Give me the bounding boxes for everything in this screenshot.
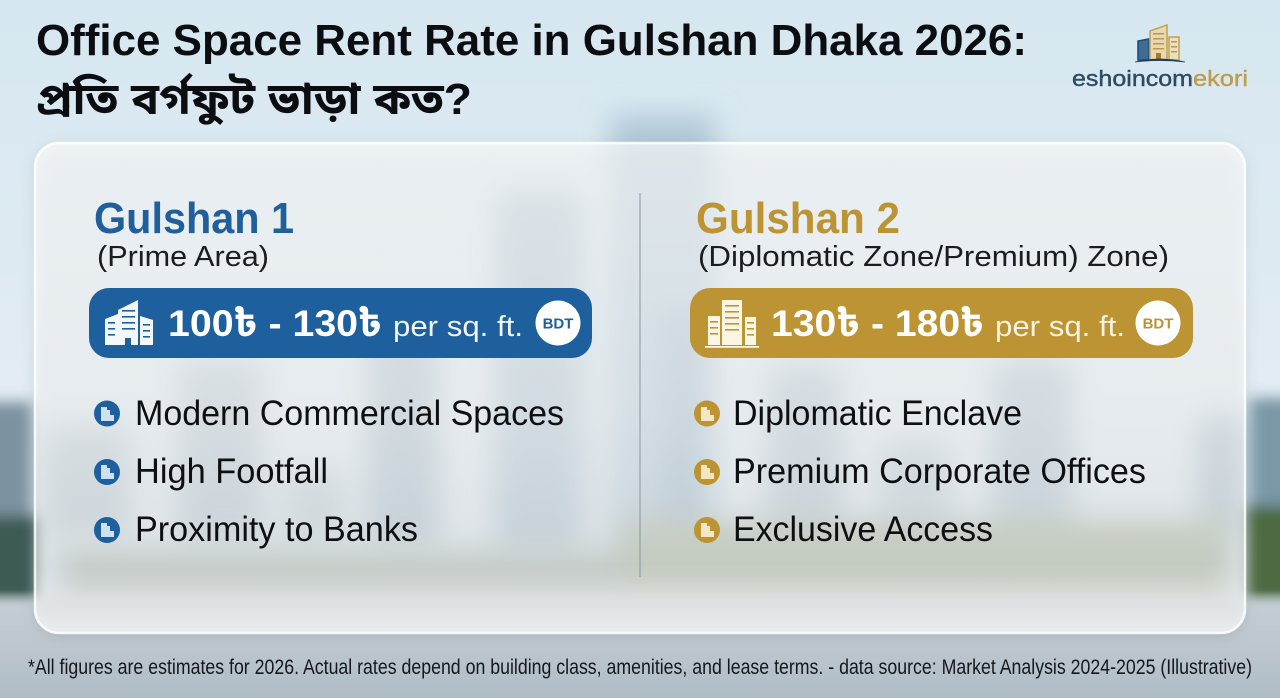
feature: High Footfall: High Footfall: [135, 452, 328, 491]
main glass panel: [35, 143, 1245, 633]
BDT badge: [1136, 300, 1180, 346]
feature: Exclusive Access: Exclusive Access: [733, 510, 993, 549]
subheading: Prime Area: (Prime Area): [97, 241, 269, 273]
panel shadow: [35, 146, 1245, 636]
feature: Modern Commercial Spaces: Modern Commercial Spaces: [135, 394, 564, 433]
unit text: per sq. ft.: [995, 311, 1125, 343]
icon: buildings: [105, 300, 153, 345]
feature: Proximity to Banks: Proximity to Banks: [135, 510, 418, 549]
title: [36, 16, 1027, 125]
logo: eshoincomekori: eshoincom: [1072, 66, 1193, 91]
price pill: Gulshan 2: [690, 288, 1193, 358]
icon: logo buildings: [1135, 25, 1185, 62]
price text: 100৳ - 130৳: [168, 303, 382, 344]
title: Office Space Rent Rate in Gulshan Dhaka 2026:: [36, 16, 1027, 65]
price text: 130৳ - 180৳: [771, 303, 984, 344]
center divider: [639, 193, 641, 577]
logo: eshoincomekori: [1072, 25, 1248, 91]
BDT badge: [536, 300, 580, 346]
heading: Gulshan 1: Gulshan 1: [94, 194, 294, 243]
unit text: per sq. ft.: [393, 311, 523, 343]
icon: buildings: [705, 300, 759, 348]
column: Gulshan 2: [690, 194, 1193, 549]
logo: eshoincomekori: ekori: [1193, 66, 1248, 91]
column: Gulshan 1: [89, 194, 592, 549]
title: প্রতি বর্গফুট ভাড়া কত?: [36, 73, 472, 125]
BDT badge: BDT: [543, 316, 573, 332]
feature: Premium Corporate Offices: Premium Corporate Offices: [733, 452, 1146, 491]
subheading: Diplomatic Zone: (Diplomatic Zone/Premium) Zone): [698, 241, 1169, 273]
heading: Gulshan 2: Gulshan 2: [696, 194, 900, 243]
price pill: Gulshan 1: [89, 288, 592, 358]
feature: Diplomatic Enclave: Diplomatic Enclave: [733, 394, 1022, 433]
BDT badge: BDT: [1143, 316, 1173, 332]
